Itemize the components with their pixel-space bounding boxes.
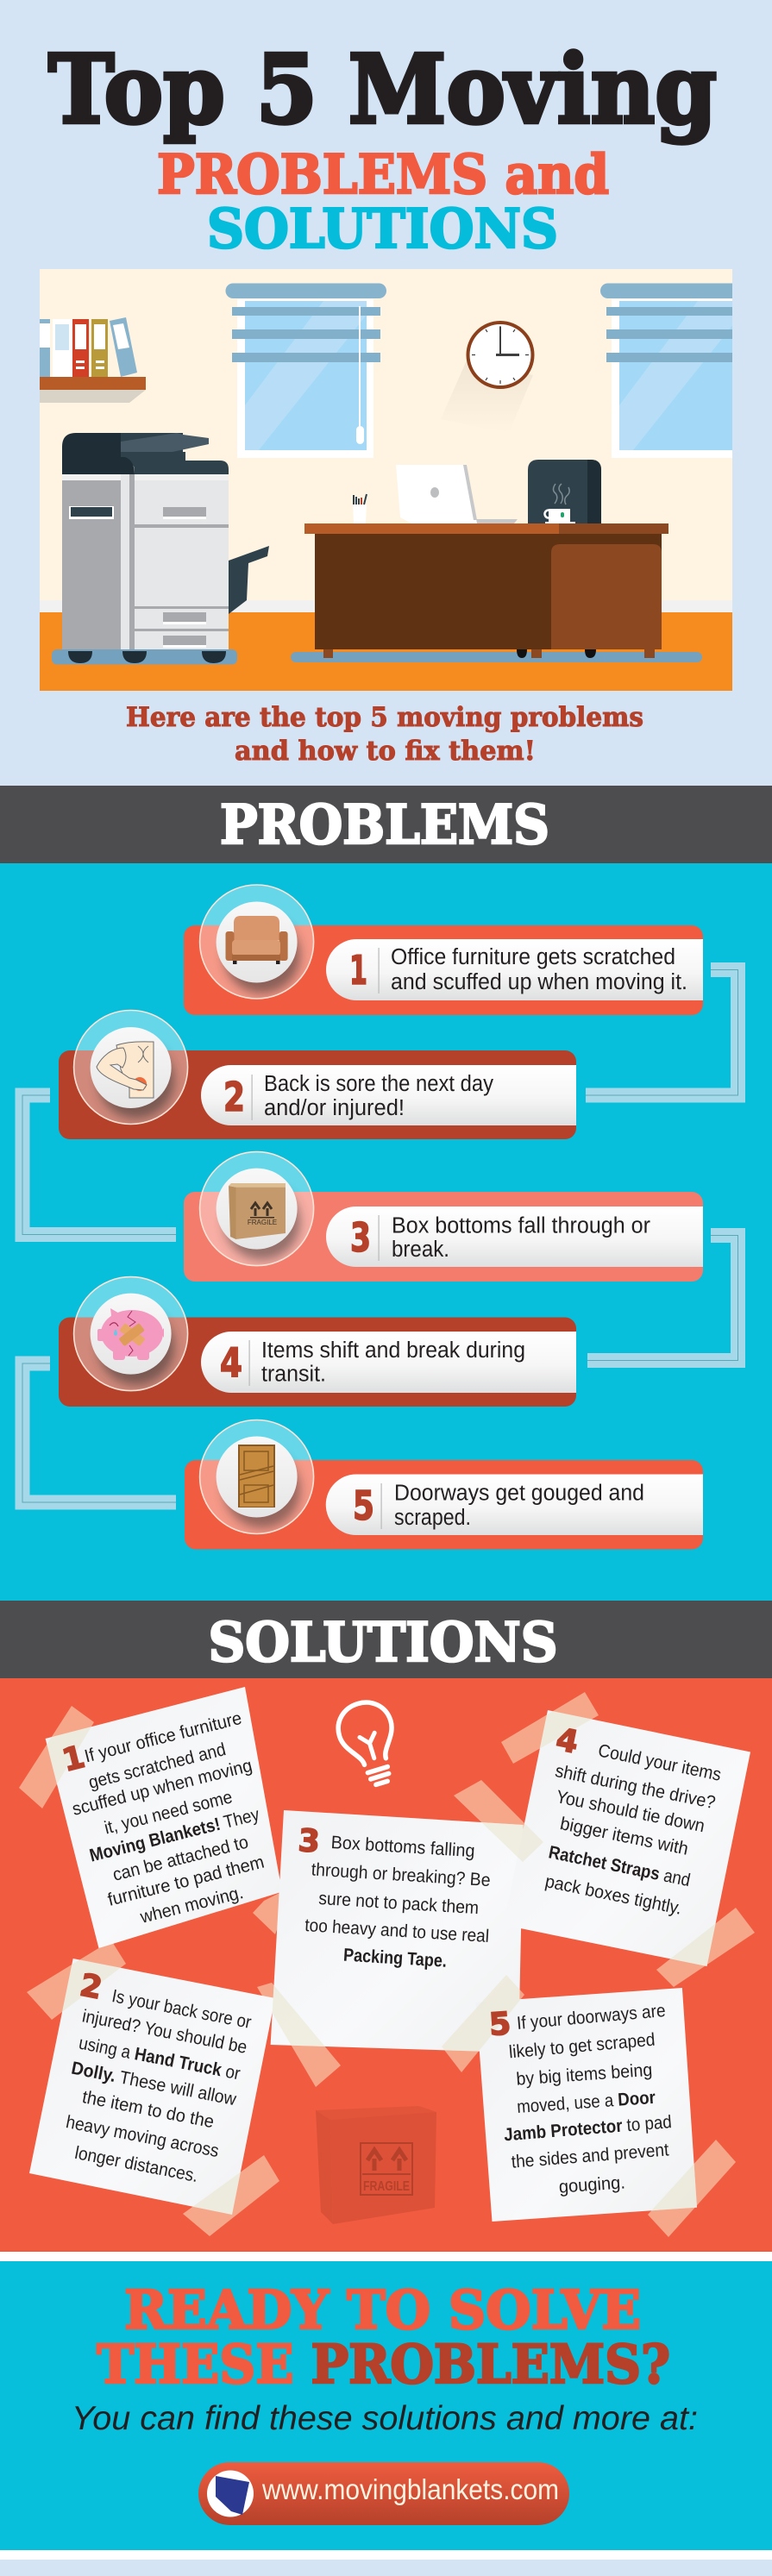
white divider bbox=[0, 2252, 772, 2261]
note card 2: heavy moving across bbox=[65, 2112, 221, 2161]
icon: sore back bbox=[97, 1042, 154, 1098]
note card 5: Jamb Protector to pad bbox=[503, 2112, 673, 2145]
illustration: office scene bbox=[35, 269, 761, 691]
connector arrows between problems bbox=[22, 969, 738, 1502]
number: 3 bbox=[297, 1823, 321, 1860]
header bar: problems: PROBLEMS bbox=[220, 793, 549, 856]
number 5: 5 bbox=[353, 1482, 374, 1529]
icon: faded fragile box: FRAGILE bbox=[363, 2179, 410, 2194]
subtitle: problems and: PROBLEMS and bbox=[157, 142, 609, 206]
note card 1: gets scratched and bbox=[86, 1739, 228, 1793]
note card 1: Moving Blankets! They bbox=[88, 1804, 262, 1866]
problem 3 bbox=[184, 1152, 703, 1282]
note card 1 bbox=[45, 1687, 279, 1948]
note card 2: using a Hand Truck or bbox=[77, 2034, 242, 2084]
problem 1 bbox=[184, 885, 703, 1015]
panel: call to action bbox=[0, 2261, 772, 2550]
problem 1 text: Office furniture gets scratched bbox=[391, 945, 675, 969]
problem 2 text bbox=[264, 1072, 493, 1120]
number 3: 3 bbox=[350, 1214, 371, 1261]
problem 3 text: Box bottoms fall through or bbox=[392, 1214, 650, 1238]
note card 2: Is your back sore or bbox=[110, 1986, 253, 2033]
subtitle: solutions: SOLUTIONS bbox=[207, 197, 558, 260]
icon: logo bbox=[207, 2470, 254, 2516]
copier floor mat and wheels bbox=[52, 649, 237, 664]
problem 3 text: break. bbox=[392, 1238, 449, 1262]
note card 1: scuffed up when moving bbox=[70, 1756, 254, 1820]
tagline: You can find these solutions and more at: bbox=[72, 2400, 698, 2437]
note card 4 bbox=[521, 1710, 750, 1966]
icon: armchair bbox=[226, 916, 288, 964]
note card 1: it, you need some bbox=[103, 1787, 235, 1838]
number 2: 2 bbox=[223, 1074, 245, 1120]
tape strips bbox=[19, 1692, 755, 2237]
note card 4: shift during the drive? bbox=[554, 1761, 717, 1813]
icon: light bulb bbox=[332, 1696, 407, 1790]
number: 2 bbox=[77, 1968, 105, 2007]
intro text bbox=[126, 702, 643, 767]
items on desk bbox=[353, 460, 601, 523]
number: 5 bbox=[488, 2006, 512, 2043]
panel: problems background bbox=[0, 863, 772, 1601]
note card 4: Ratchet Straps and bbox=[547, 1842, 692, 1890]
note card 1: when moving. bbox=[138, 1883, 245, 1927]
note card 4: You should tie down bbox=[555, 1787, 706, 1836]
note card 1: can be attached to bbox=[110, 1833, 250, 1885]
problem 2 text: and/or injured! bbox=[264, 1096, 405, 1120]
problem 1 text bbox=[391, 945, 687, 994]
window right bbox=[600, 283, 732, 458]
header bar: solutions bbox=[0, 1601, 772, 1678]
white divider bbox=[0, 2550, 772, 2560]
note card 2 bbox=[29, 1959, 273, 2215]
problem 5 text bbox=[394, 1482, 644, 1530]
problem 4 text: transit. bbox=[261, 1363, 326, 1387]
problem 4 bbox=[59, 1277, 576, 1407]
note card 2: Dolly. These will allow bbox=[70, 2059, 238, 2109]
icon: fragile box bbox=[229, 1183, 286, 1239]
icon: fragile box: FRAGILE bbox=[248, 1219, 277, 1226]
photocopier bbox=[62, 433, 269, 651]
panel: solutions background bbox=[0, 1678, 772, 2252]
website button: www.movingblankets.com bbox=[261, 2473, 559, 2505]
problem 4 text bbox=[261, 1338, 525, 1387]
note card 1: If your office furniture bbox=[83, 1708, 244, 1766]
note card 5: If your doorways are bbox=[516, 2001, 666, 2034]
note card 2: injured? You should be bbox=[80, 2006, 248, 2058]
problem 3 text bbox=[392, 1214, 650, 1262]
problem 4 text: Items shift and break during bbox=[261, 1338, 525, 1363]
heading line 2: THESE bbox=[97, 2333, 293, 2396]
note card 1: furniture to pad them bbox=[106, 1852, 267, 1910]
number 1: 1 bbox=[349, 947, 367, 993]
wall clock bbox=[452, 321, 535, 395]
note card 5: gouging. bbox=[558, 2172, 626, 2197]
website button bbox=[198, 2462, 569, 2525]
number 4: 4 bbox=[220, 1339, 242, 1386]
note card 3: through or breaking? Be bbox=[311, 1859, 491, 1890]
note card 3 bbox=[271, 1810, 524, 2052]
icon: faded fragile box bbox=[316, 2106, 436, 2224]
number: 1 bbox=[59, 1739, 88, 1779]
intro text: Here are the top 5 moving problems bbox=[126, 702, 643, 733]
number: 4 bbox=[553, 1722, 581, 1761]
note card 3: too heavy and to use real bbox=[304, 1915, 490, 1946]
heading line 1: READY TO SOLVE bbox=[124, 2278, 641, 2341]
note card 5: likely to get scraped bbox=[508, 2030, 656, 2062]
icon: scratched door bbox=[238, 1445, 275, 1507]
note card 3: Box bottoms falling bbox=[330, 1833, 475, 1861]
note card 5 bbox=[480, 1988, 697, 2222]
problem 2 text: Back is sore the next day bbox=[264, 1072, 493, 1096]
problem 5 text: scraped. bbox=[394, 1506, 471, 1530]
window left bbox=[226, 283, 386, 458]
note card 3: sure not to pack them bbox=[318, 1889, 480, 1918]
heading line 2 bbox=[97, 2333, 670, 2396]
note card 2: longer distances. bbox=[73, 2143, 200, 2186]
note card 5: the sides and prevent bbox=[511, 2140, 669, 2172]
problem 2 bbox=[59, 1011, 576, 1139]
shelf with binders bbox=[35, 317, 146, 403]
intro text: and how to fix them! bbox=[235, 736, 536, 767]
note card 4: pack boxes tightly. bbox=[543, 1871, 683, 1919]
problem 5 text: Doorways get gouged and bbox=[394, 1482, 644, 1506]
note card 2: the item to do the bbox=[80, 2087, 216, 2132]
note card 5: by big items being bbox=[516, 2060, 653, 2090]
note card 4: Could your items bbox=[596, 1740, 723, 1785]
header bar: problems bbox=[0, 786, 772, 863]
heading line 2: PROBLEMS? bbox=[311, 2333, 670, 2396]
note card 4: bigger items with bbox=[558, 1814, 690, 1859]
note card 3: Packing Tape. bbox=[342, 1946, 448, 1971]
problem 5 bbox=[185, 1420, 703, 1549]
icon: broken piggy bank bbox=[97, 1308, 164, 1360]
title: Top 5 Moving: Top 5 Moving bbox=[48, 34, 717, 145]
note card 5: moved, use a Door bbox=[516, 2088, 656, 2117]
problem 1 text: and scuffed up when moving it. bbox=[391, 970, 687, 994]
header bar: solutions: SOLUTIONS bbox=[209, 1610, 557, 1674]
desk bbox=[291, 523, 702, 662]
